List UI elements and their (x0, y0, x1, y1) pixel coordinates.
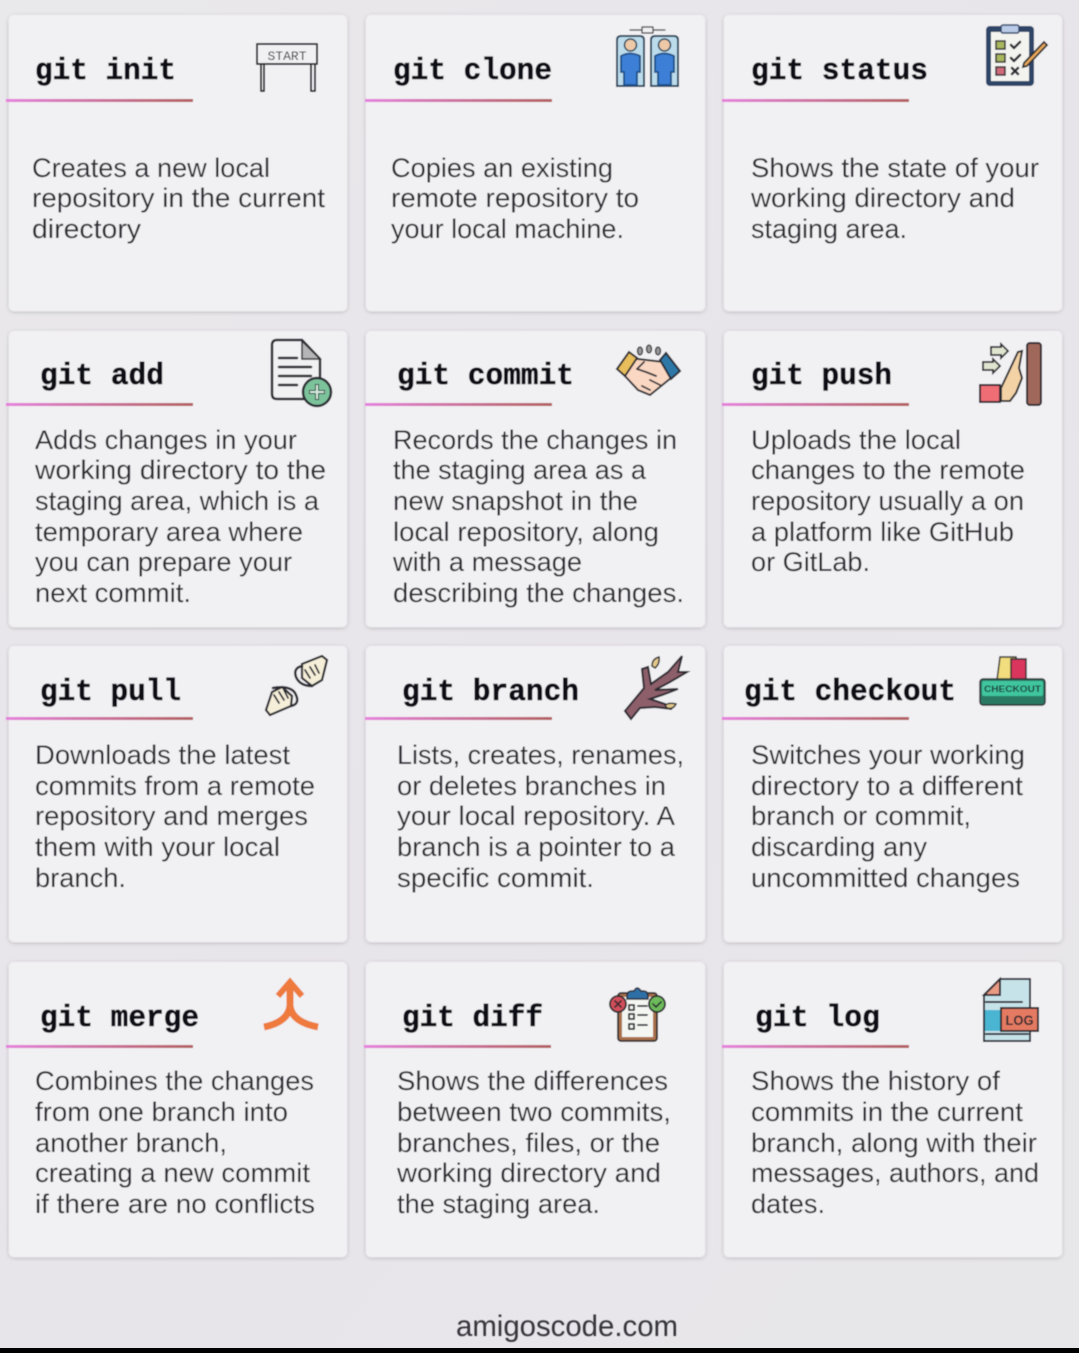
description: branch. (35, 863, 126, 893)
card: git merge (6, 962, 347, 1257)
icon: tree branch (625, 656, 687, 719)
description: another branch, (35, 1128, 227, 1158)
card: git init (6, 15, 347, 311)
description: Shows the differences (397, 1066, 668, 1096)
description: Adds changes in your (35, 425, 297, 455)
card: git diff (364, 962, 705, 1257)
description: or deletes branches in (397, 771, 666, 801)
icon: hands pulling rope (266, 656, 327, 715)
description: repository usually a on (751, 486, 1024, 516)
card: git clone (365, 15, 705, 311)
footer: website: amigoscode.com (456, 1310, 678, 1343)
bottom black bar (0, 1348, 1079, 1353)
description: local repository, along (393, 517, 659, 547)
heading: git checkout: git checkout (744, 675, 956, 710)
icon: start sign: START (267, 49, 307, 64)
description: Switches your working (751, 740, 1025, 770)
icon: checklist clipboard with pencil (986, 25, 1047, 86)
description: staging area, which is a (35, 486, 320, 516)
description: working directory and (750, 183, 1015, 213)
heading: git branch: git branch (402, 675, 579, 710)
heading: git clone: git clone (393, 54, 552, 89)
description (397, 740, 684, 893)
description: repository and merges (35, 801, 308, 831)
heading: git push: git push (751, 359, 892, 394)
card: git checkout (722, 646, 1062, 942)
description: directory (32, 214, 142, 244)
description: working directory to the (34, 455, 326, 485)
underline (6, 99, 193, 102)
description: the staging area as a (393, 455, 647, 485)
description: if there are no conflicts (35, 1189, 315, 1219)
heading: git add: git add (40, 359, 164, 394)
description: a platform like GitHub (751, 517, 1014, 547)
description: your local repository. A (397, 801, 675, 831)
icon: clones in capsules (617, 27, 678, 86)
underline (722, 717, 909, 720)
description (392, 425, 684, 608)
description: Shows the state of your (751, 153, 1039, 183)
description: Records the changes in (393, 425, 677, 455)
underline (722, 99, 909, 102)
description (396, 1066, 671, 1219)
description: Shows the history of (751, 1066, 1001, 1096)
description: Lists, creates, renames, (397, 740, 684, 770)
description: commits from a remote (35, 771, 315, 801)
description (32, 153, 326, 244)
description (35, 740, 315, 893)
description: creating a new commit (35, 1158, 311, 1188)
underline (365, 99, 552, 102)
description: repository in the current (32, 183, 326, 213)
underline (6, 403, 193, 406)
underline (6, 1045, 193, 1048)
description: messages, authors, and (751, 1158, 1039, 1188)
description: commits in the current (751, 1097, 1024, 1127)
description: Downloads the latest (35, 740, 290, 770)
heading: git init: git init (35, 54, 176, 89)
card: git add (6, 331, 347, 627)
icon: document with plus (272, 340, 331, 406)
heading: git merge: git merge (40, 1001, 199, 1036)
icon: handshake (617, 345, 680, 395)
description: specific commit. (397, 863, 594, 893)
underline (6, 717, 193, 720)
description (34, 425, 326, 608)
description: changes to the remote (751, 455, 1025, 485)
card: git commit (365, 331, 705, 627)
description: Creates a new local (32, 153, 270, 183)
description: describing the changes. (393, 578, 684, 608)
description: branch or commit, (751, 801, 971, 831)
description: temporary area where (35, 517, 303, 547)
description: branch is a pointer to a (397, 832, 676, 862)
description: branches, files, or the (397, 1128, 660, 1158)
underline (722, 1045, 909, 1048)
description: your local machine. (391, 214, 624, 244)
description: Copies an existing (391, 153, 613, 183)
underline (722, 403, 909, 406)
description (751, 740, 1025, 893)
description: Uploads the local (751, 425, 961, 455)
description: new snapshot in the (393, 486, 638, 516)
icon: log file (984, 979, 1038, 1041)
description: next commit. (35, 578, 191, 608)
description: between two commits, (397, 1097, 671, 1127)
description (751, 425, 1025, 577)
card: git log (722, 962, 1062, 1257)
card: git status (722, 15, 1062, 311)
card: git push (722, 331, 1062, 627)
description: working directory and (396, 1158, 661, 1188)
description: them with your local (35, 832, 280, 862)
description (751, 1066, 1039, 1219)
description: with a message (392, 547, 582, 577)
card: git branch (365, 646, 705, 942)
description: or GitLab. (751, 547, 870, 577)
description (391, 153, 639, 244)
description: the staging area. (397, 1189, 600, 1219)
description: remote repository to (391, 183, 639, 213)
icon: hand pushing wall (980, 343, 1041, 405)
icon: checkout counter with bags: CHECKOUT (984, 684, 1041, 695)
icon: log file: LOG (1006, 1012, 1034, 1028)
heading: git pull: git pull (40, 675, 181, 710)
description: you can prepare your (35, 547, 292, 577)
description: branch, along with their (751, 1128, 1037, 1158)
description: discarding any (751, 832, 927, 862)
icon: checkout counter with bags (980, 657, 1045, 705)
heading: git commit: git commit (397, 359, 574, 394)
description: Combines the changes (35, 1066, 314, 1096)
icon: clipboard with cross and check (610, 988, 665, 1041)
heading: git log: git log (755, 1001, 880, 1036)
description: staging area. (751, 214, 907, 244)
card: git pull (6, 646, 347, 942)
description (35, 1066, 315, 1219)
heading: git diff: git diff (402, 1001, 543, 1036)
description: uncommitted changes (751, 863, 1020, 893)
heading: git status: git status (751, 54, 928, 89)
underline (364, 1045, 551, 1048)
description: from one branch into (35, 1097, 288, 1127)
icon: merge arrow (264, 982, 318, 1027)
underline (365, 403, 552, 406)
icon: start sign (257, 44, 317, 91)
description: directory to a different (751, 771, 1024, 801)
description (750, 153, 1039, 244)
underline (365, 717, 552, 720)
description: dates. (751, 1189, 825, 1219)
